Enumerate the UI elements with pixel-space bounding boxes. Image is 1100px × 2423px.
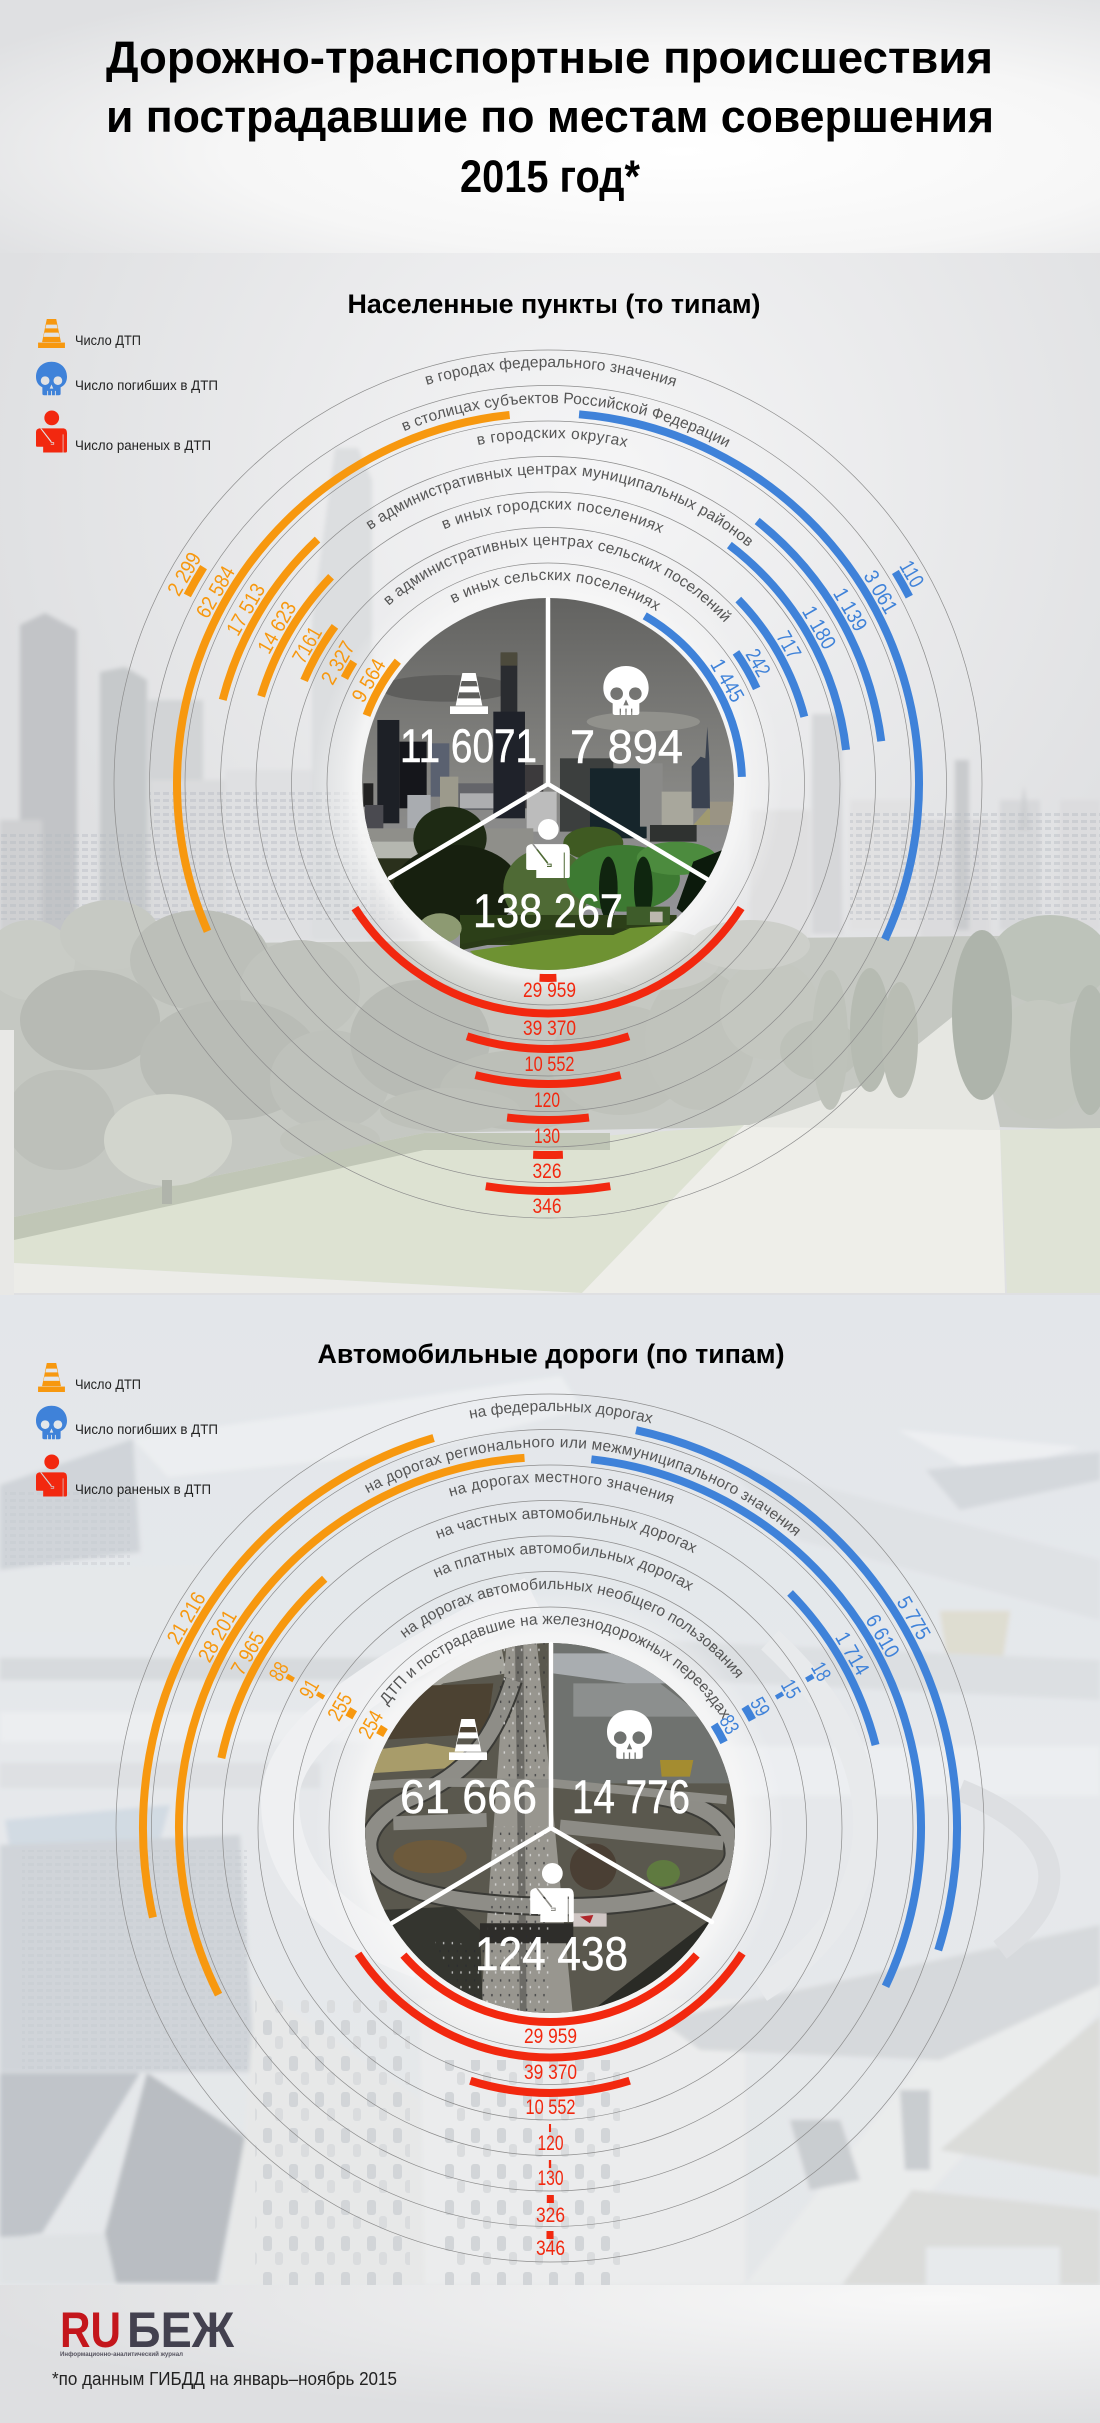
icon: cone white xyxy=(450,673,488,714)
icon: skull white xyxy=(607,1710,652,1759)
total injured: 124 438 xyxy=(475,1927,628,1980)
lawn xyxy=(14,1125,744,1293)
white ramp xyxy=(280,1595,533,1960)
logo: Информационно-аналитический журнал xyxy=(60,2350,183,2358)
ring labels: в административных центрах муниципальных районов xyxy=(366,466,752,546)
red values: roads: 326 xyxy=(536,2204,565,2227)
total deaths: 14 776 xyxy=(572,1770,690,1823)
blue values: 110 xyxy=(895,557,928,592)
blue values: 6 610 xyxy=(861,1611,904,1662)
blue values xyxy=(705,557,928,706)
icon: skull xyxy=(36,362,67,396)
red values: roads xyxy=(524,2025,577,2260)
total accidents: 11 6071 xyxy=(400,719,537,772)
title: 2015 год* xyxy=(460,151,640,202)
icon: cone white xyxy=(449,1719,487,1760)
ring labels: ДТП и пострадавшие на железнодорожных переездах xyxy=(380,1616,730,1719)
panel: settlements background photo xyxy=(0,253,1100,1295)
blue values: 242 xyxy=(741,645,775,681)
title: Дорожно-транспортные происшествия xyxy=(106,32,993,83)
orange values xyxy=(163,1588,388,1743)
blue values: 59 xyxy=(745,1693,774,1721)
orange values: 88 xyxy=(265,1658,294,1685)
footer background xyxy=(0,2285,1100,2423)
ring labels: на дорогах автомобильных необщего пользования xyxy=(400,1578,742,1678)
blue values: 717 xyxy=(771,627,805,663)
red values: settlements: 130 xyxy=(534,1125,560,1148)
red values: roads: 29 959 xyxy=(524,2025,577,2048)
orange values: 14 623 xyxy=(253,598,301,658)
blue values: 15 xyxy=(776,1676,805,1703)
chart: roads radial xyxy=(116,1394,984,2262)
legend label: injured: Число раненых в ДТП xyxy=(75,1481,211,1497)
blue values: 1 445 xyxy=(705,655,748,706)
red bars: injured xyxy=(84,320,1012,1248)
blue values: 5 775 xyxy=(892,1593,935,1644)
ring labels: в иных сельских поселениях xyxy=(450,572,660,612)
ring labels: на частных автомобильных дорогах xyxy=(436,1508,697,1554)
blue bars: deaths xyxy=(0,225,1100,1343)
ring labels: в административных центрах сельских поселений xyxy=(384,536,732,622)
orange values: 255 xyxy=(323,1689,357,1725)
icon: skull white xyxy=(603,666,649,715)
orange values: 7 965 xyxy=(227,1628,270,1679)
red values: settlements: 120 xyxy=(534,1089,560,1112)
dividers: circle sectors xyxy=(392,1644,712,1923)
orange values: 2 299 xyxy=(163,549,206,600)
orange values: 7161 xyxy=(288,623,327,667)
red values: settlements: 10 552 xyxy=(524,1053,574,1076)
orange bars: accidents xyxy=(0,235,1097,1333)
trees xyxy=(0,900,1100,1217)
heading: settlements: Населенные пункты (то типам) xyxy=(348,289,760,319)
red values: settlements xyxy=(523,979,576,1218)
icon: cone xyxy=(38,1363,65,1392)
ring labels xyxy=(364,1402,800,1719)
footnote: *по данным ГИБДД на январь–ноябрь 2015 xyxy=(52,2369,397,2389)
red values: roads: 10 552 xyxy=(526,2096,576,2119)
orange bars: accidents xyxy=(52,1330,1048,2326)
total deaths: 7 894 xyxy=(570,720,683,773)
icon: injured white xyxy=(530,1863,574,1922)
blue bars: deaths xyxy=(66,1344,1034,2312)
orange values: 62 584 xyxy=(192,562,240,622)
blue values: 1 714 xyxy=(830,1628,873,1680)
orange values: 254 xyxy=(354,1707,388,1743)
red values: roads: 130 xyxy=(538,2167,564,2190)
red values: settlements: 326 xyxy=(532,1160,562,1183)
red values: settlements: 29 959 xyxy=(523,979,576,1002)
legend: roads xyxy=(36,1363,218,1497)
red values: roads: 346 xyxy=(536,2237,565,2260)
icon: cone xyxy=(38,319,65,348)
legend label: injured: Число раненых в ДТП xyxy=(75,437,211,453)
total injured: 138 267 xyxy=(473,884,623,937)
chart: settlements radial xyxy=(114,350,982,1218)
ring labels: на платных автомобильных дорогах xyxy=(434,1543,694,1591)
dividers: circle sectors xyxy=(390,599,707,879)
ring labels: на дорогах регионального или межмуниципального значения xyxy=(364,1438,800,1536)
photo halo xyxy=(313,549,783,1019)
total accidents: 61 666 xyxy=(400,1770,537,1823)
legend: settlements xyxy=(36,319,218,453)
orange values: 2 327 xyxy=(317,637,360,689)
legend label: accidents: Число ДТП xyxy=(75,1376,141,1392)
legend label: deaths: Число погибших в ДТП xyxy=(75,377,218,393)
orange values: 28 201 xyxy=(194,1606,242,1666)
ring labels: в иных городских поселениях xyxy=(442,500,664,534)
icon: injured person xyxy=(36,410,67,452)
title xyxy=(106,32,994,202)
orange values: 9 564 xyxy=(348,655,391,706)
orange values: 91 xyxy=(295,1676,324,1703)
blue values xyxy=(714,1593,935,1738)
ring labels: на дорогах местного значения xyxy=(449,1474,674,1504)
legend label: deaths: Число погибших в ДТП xyxy=(75,1421,218,1437)
heading: roads: Автомобильные дороги (по типам) xyxy=(318,1339,784,1369)
photo: highway interchange xyxy=(360,1640,740,2020)
blue values: 3 061 xyxy=(859,567,902,618)
red values: roads: 39 370 xyxy=(524,2061,577,2084)
blue values: 1 180 xyxy=(797,602,840,653)
panel: roads background photo xyxy=(0,1295,1100,2285)
blue values: 83 xyxy=(714,1711,743,1738)
ring labels: в столицах субъектов Российской Федерации xyxy=(402,392,730,448)
logo xyxy=(60,2302,235,2358)
ring labels: в городах федерального значения xyxy=(425,358,676,386)
blue values: 1 139 xyxy=(828,584,871,635)
legend label: accidents: Число ДТП xyxy=(75,332,141,348)
icon: injured person xyxy=(36,1454,67,1496)
orange values: 21 216 xyxy=(163,1588,211,1648)
icon: skull xyxy=(36,1406,67,1440)
red values: settlements: 346 xyxy=(532,1195,562,1218)
icon: injured white xyxy=(526,819,570,878)
ring labels xyxy=(366,358,752,622)
photo: Melbourne skyline and park xyxy=(360,595,740,975)
ring labels: на федеральных дорогах xyxy=(470,1402,653,1424)
logo: RU xyxy=(60,2302,121,2358)
logo: БЕЖ xyxy=(127,2302,235,2358)
red values: settlements: 39 370 xyxy=(523,1017,576,1040)
title: и пострадавшие по местам совершения xyxy=(106,91,994,142)
ring labels: в городских округах xyxy=(477,430,628,447)
orange values: 17 513 xyxy=(222,580,270,640)
orange values xyxy=(163,549,391,706)
blue values: 18 xyxy=(806,1658,835,1685)
header background xyxy=(0,0,1100,253)
red bars: injured xyxy=(139,1417,961,2239)
red values: roads: 120 xyxy=(538,2132,564,2155)
photo halo xyxy=(315,1593,785,2063)
